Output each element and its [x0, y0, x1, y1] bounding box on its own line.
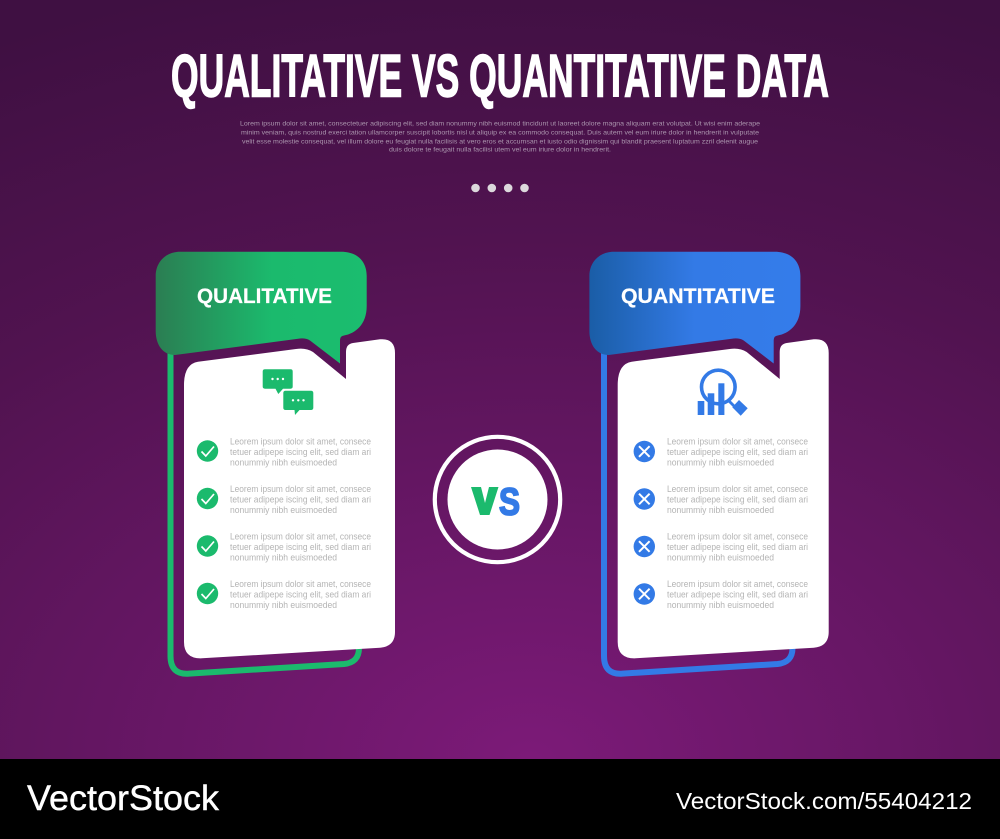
list item 2: tetuer adipepe iscing elit, sed diam ari	[667, 494, 808, 504]
list item 3: Leorem ipsum dolor sit amet, consece	[230, 530, 371, 542]
footer url: VectorStock.com/55404212	[676, 788, 972, 814]
list item 3: nonummiy nibh euismoeded	[230, 552, 337, 562]
list item 4: tetuer adipepe iscing elit, sed diam ari	[230, 588, 371, 600]
list item 2	[197, 483, 371, 515]
speech bubble header	[589, 252, 800, 364]
panel: quantitative	[589, 252, 829, 674]
list item 1: Leorem ipsum dolor sit amet, consece	[667, 436, 808, 446]
card outline: green	[170, 350, 359, 674]
list item 4: nonummiy nibh euismoeded	[667, 599, 774, 610]
panel: qualitative	[156, 252, 395, 674]
list item 3: nonummiy nibh euismoeded	[667, 552, 774, 562]
list item 1: tetuer adipepe iscing elit, sed diam ari	[667, 446, 808, 457]
list item 4: Leorem ipsum dolor sit amet, consece	[230, 578, 371, 589]
heading: qualitative: QUALITATIVE	[197, 285, 332, 308]
intro paragraph: minim veniam, quis nostrud exerci tation ullamcorper suscipit lobortis nisl ut aliquip ex ea commodo consequat. Duis autem vel eum iriure dolor in hendrerit in vulputate	[241, 130, 759, 136]
icon: magnifier with bar chart	[698, 370, 748, 416]
speech bubble header	[156, 252, 367, 364]
vs badge: S	[499, 482, 520, 524]
intro paragraph: duis dolore te feugait nulla facilisi utem vel eum iriure dolor in hendrerit.	[389, 146, 611, 154]
vs badge	[435, 437, 560, 562]
list item 1: Leorem ipsum dolor sit amet, consece	[230, 436, 371, 446]
list item 2: Leorem ipsum dolor sit amet, consece	[667, 483, 808, 494]
intro paragraph	[240, 120, 760, 154]
list item 2: nonummiy nibh euismoeded	[230, 504, 337, 515]
list item 2: tetuer adipepe iscing elit, sed diam ari	[230, 494, 371, 504]
list item 1	[197, 436, 371, 468]
list item 1	[634, 436, 808, 468]
list item 4: Leorem ipsum dolor sit amet, consece	[667, 578, 808, 589]
list item 1: tetuer adipepe iscing elit, sed diam ari	[230, 446, 371, 457]
list item 2: Leorem ipsum dolor sit amet, consece	[230, 483, 371, 494]
list item 3	[634, 530, 808, 562]
list item 3	[197, 530, 371, 562]
list item 4	[634, 578, 808, 610]
heading: quantitative: QUANTITATIVE	[621, 285, 775, 308]
card outline: blue	[604, 350, 792, 674]
footer bar	[0, 759, 1000, 839]
intro paragraph: Lorem ipsum dolor sit amet, consectetuer adipiscing elit, sed diam nonummy nibh euismod tincidunt ut laoreet dolore magna aliquam erat volutpat. Ut wisi enim aderape	[240, 120, 760, 128]
list item 3: tetuer adipepe iscing elit, sed diam ari	[230, 541, 371, 552]
list item 4: tetuer adipepe iscing elit, sed diam ari	[667, 588, 808, 600]
list item 1: nonummiy nibh euismoeded	[230, 456, 337, 468]
white card	[618, 339, 829, 658]
list item 4: nonummiy nibh euismoeded	[230, 599, 337, 610]
list item 2	[634, 483, 808, 515]
white card	[184, 339, 395, 658]
list item 4	[197, 578, 371, 610]
intro paragraph: velit esse molestie consequat, vel illum dolore eu feugiat nulla facilisis at vero eros et accumsan et iusto odio dignissim qui blandit praesent luptatum zzril delenit augue	[242, 138, 758, 146]
footer logo: VectorStock	[27, 779, 220, 818]
list item 1: nonummiy nibh euismoeded	[667, 456, 774, 468]
list item 3: tetuer adipepe iscing elit, sed diam ari	[667, 541, 808, 552]
pagination dots	[471, 184, 529, 192]
icon: chat bubbles	[263, 369, 313, 415]
list item 3: Leorem ipsum dolor sit amet, consece	[667, 530, 808, 542]
list item 2: nonummiy nibh euismoeded	[667, 504, 774, 515]
